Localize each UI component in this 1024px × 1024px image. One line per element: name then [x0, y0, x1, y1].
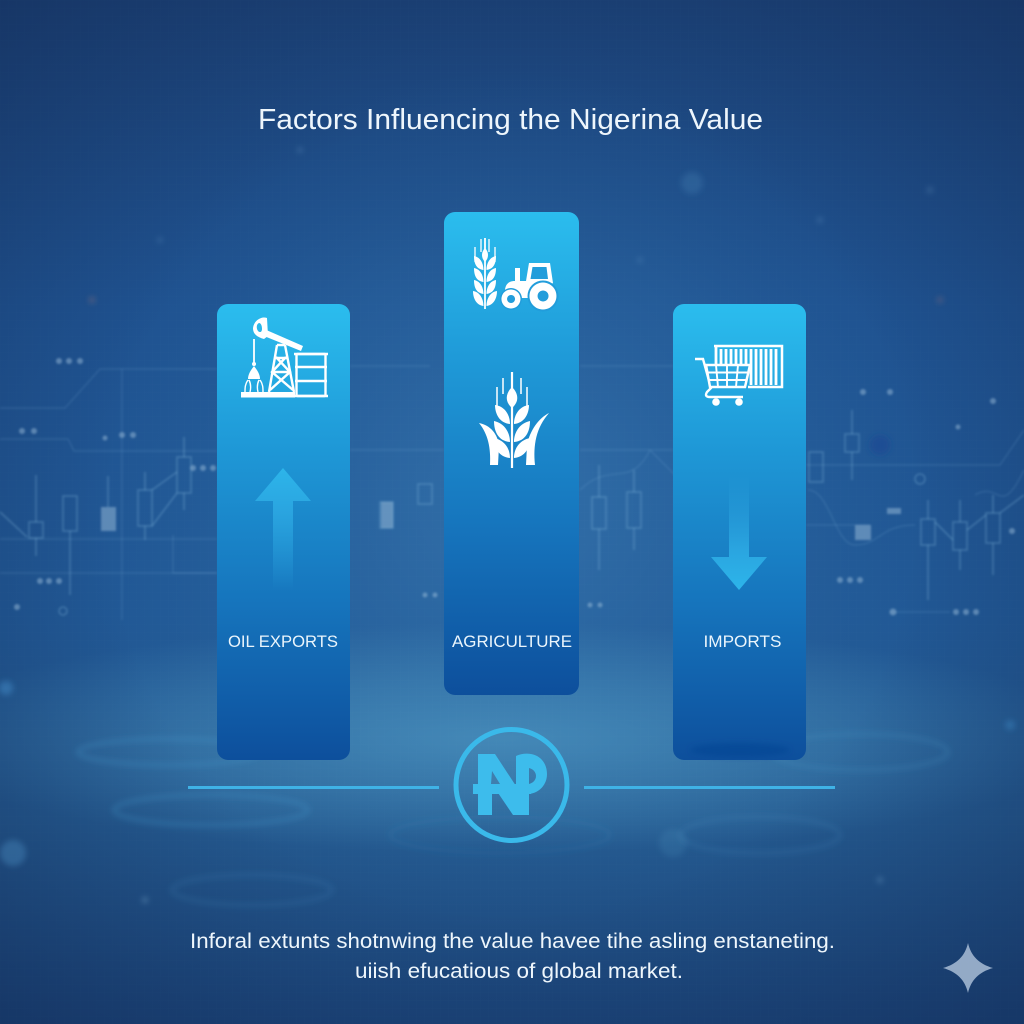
title: Factors Influencing the Nigerina Value [258, 104, 763, 136]
divider line right [584, 786, 835, 789]
panel background: agriculture [444, 212, 579, 695]
label: agriculture: AGRICULTURE [452, 632, 572, 651]
divider line left [188, 786, 439, 789]
caption line 1: Inforal extunts shotnwing the value havee tihe asling enstaneting. [190, 930, 835, 953]
caption [190, 930, 835, 983]
naira hole detail [491, 771, 500, 784]
icon: wheat in hands [479, 372, 549, 468]
background: glowing floor rings [78, 734, 948, 905]
panel background: oil exports [217, 304, 350, 760]
background: scattered bokeh dots [0, 148, 1015, 903]
icon: up arrow [255, 468, 311, 590]
icon: oil pump and barrel [241, 317, 328, 398]
panel: oil exports [217, 304, 350, 760]
panel: imports [673, 304, 806, 760]
icon: down arrow [711, 475, 767, 590]
glow at base of imports panel [690, 743, 790, 757]
caption line 2: uiish efucatious of global market. [355, 960, 683, 983]
label: imports: IMPORTS [704, 632, 782, 651]
icon: wheat and tractor [473, 238, 558, 312]
background chart: circuit lines and candlesticks [0, 358, 1024, 620]
icon: naira badge [456, 730, 567, 840]
panel background: imports [673, 304, 806, 760]
icon: shopping cart and container [695, 345, 782, 406]
label: oil exports: OIL EXPORTS [228, 632, 338, 651]
panel: agriculture [444, 212, 579, 695]
icon: sparkle star [943, 943, 993, 993]
